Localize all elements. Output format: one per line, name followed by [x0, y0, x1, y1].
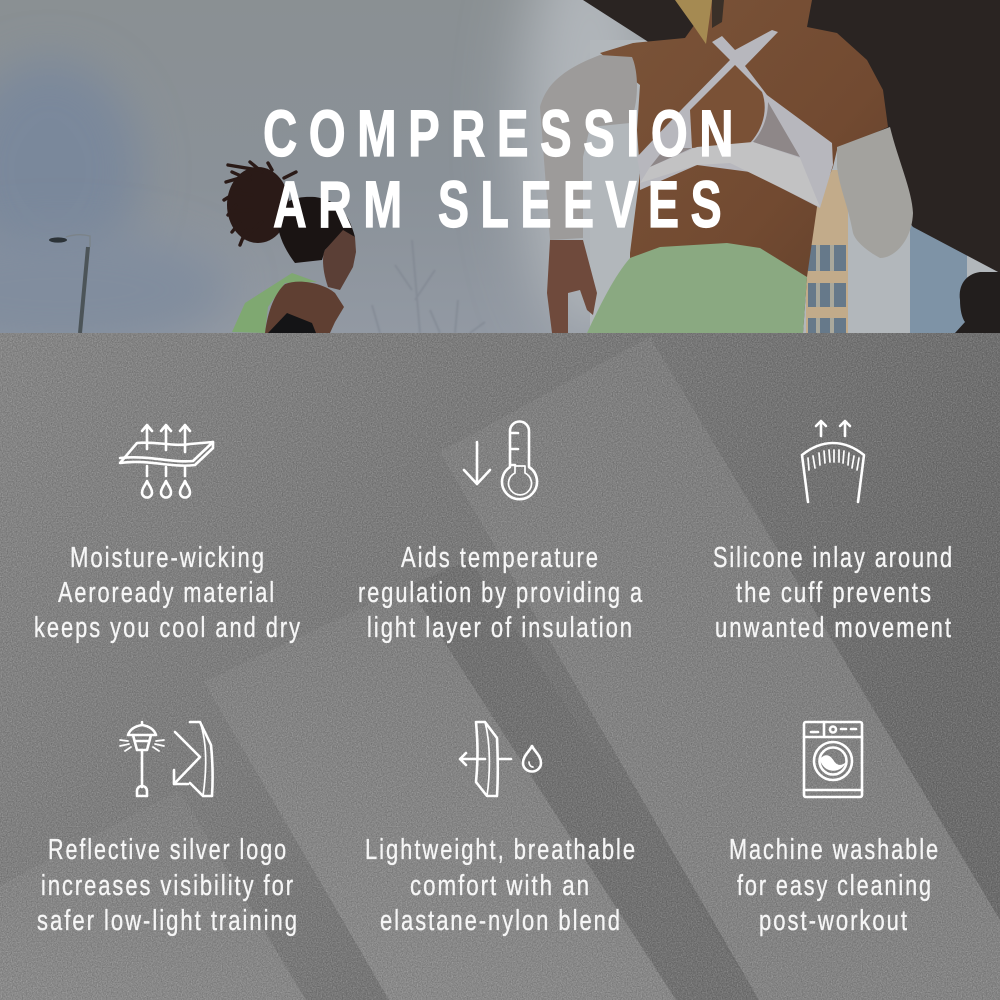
feature: moisture-wicking [34, 425, 302, 644]
feature: silicone cuff [713, 421, 954, 644]
title [263, 96, 745, 241]
photo: overpass [583, 0, 1000, 273]
text: machine washable: post-workout [759, 905, 909, 937]
text: reflective logo: increases visibility for [41, 870, 295, 902]
feature: machine washable [729, 722, 940, 937]
panel: light diagonal bar 2 [204, 586, 676, 1000]
text: breathable blend: elastane-nylon blend [380, 905, 622, 937]
textured grey panel [0, 333, 1000, 1000]
title: ARM SLEEVES [273, 167, 733, 241]
text: moisture-wicking: keeps you cool and dry [34, 612, 302, 644]
panel: dark band [408, 560, 760, 1000]
icon: street lamp and reflected light [120, 722, 213, 796]
text: temperature regulation: regulation by providing a [358, 577, 644, 609]
photo: tan building [806, 170, 848, 333]
text: machine washable [729, 834, 940, 937]
photo: foreground runner [540, 0, 913, 333]
text: reflective logo: safer low-light training [37, 905, 299, 937]
text: breathable blend [365, 834, 637, 937]
text: temperature regulation: light layer of insulation [367, 612, 634, 644]
photo: glass tower [910, 225, 967, 333]
text: temperature regulation: Aids temperature [401, 542, 600, 574]
text: breathable blend: comfort with an [410, 870, 591, 902]
feature: breathable blend [365, 722, 637, 937]
icon: moisture-wicking fabric [120, 425, 213, 498]
text: moisture-wicking: Moisture-wicking [70, 542, 266, 574]
text: silicone cuff: the cuff prevents [736, 577, 933, 609]
text: machine washable: for easy cleaning [737, 870, 933, 902]
text: reflective logo: Reflective silver logo [48, 834, 288, 866]
panel: light diagonal bar 1 [440, 337, 1000, 1000]
panel: light diagonal bar 3 [0, 790, 306, 1000]
icon: washing machine [804, 722, 862, 797]
feature: temperature regulation [358, 422, 644, 644]
hero photo [0, 0, 1000, 350]
photo: person at right edge [955, 272, 1000, 333]
photo: background runner [224, 162, 356, 333]
text: silicone cuff [713, 542, 954, 644]
photo: bare tree [372, 240, 485, 333]
text: temperature regulation [358, 542, 644, 644]
feature: reflective logo [37, 722, 299, 937]
photo: street lamp [49, 235, 90, 333]
icon: thermometer with down arrow [464, 422, 537, 499]
icon: breathable fabric with drop [460, 722, 541, 796]
title: COMPRESSION [263, 96, 745, 170]
text: moisture-wicking: Aeroready material [58, 577, 276, 609]
text: reflective logo [37, 834, 299, 937]
text: moisture-wicking [34, 542, 302, 644]
icon: cuff with silicone inlay [802, 421, 864, 502]
text: breathable blend: Lightweight, breathable [365, 834, 637, 866]
